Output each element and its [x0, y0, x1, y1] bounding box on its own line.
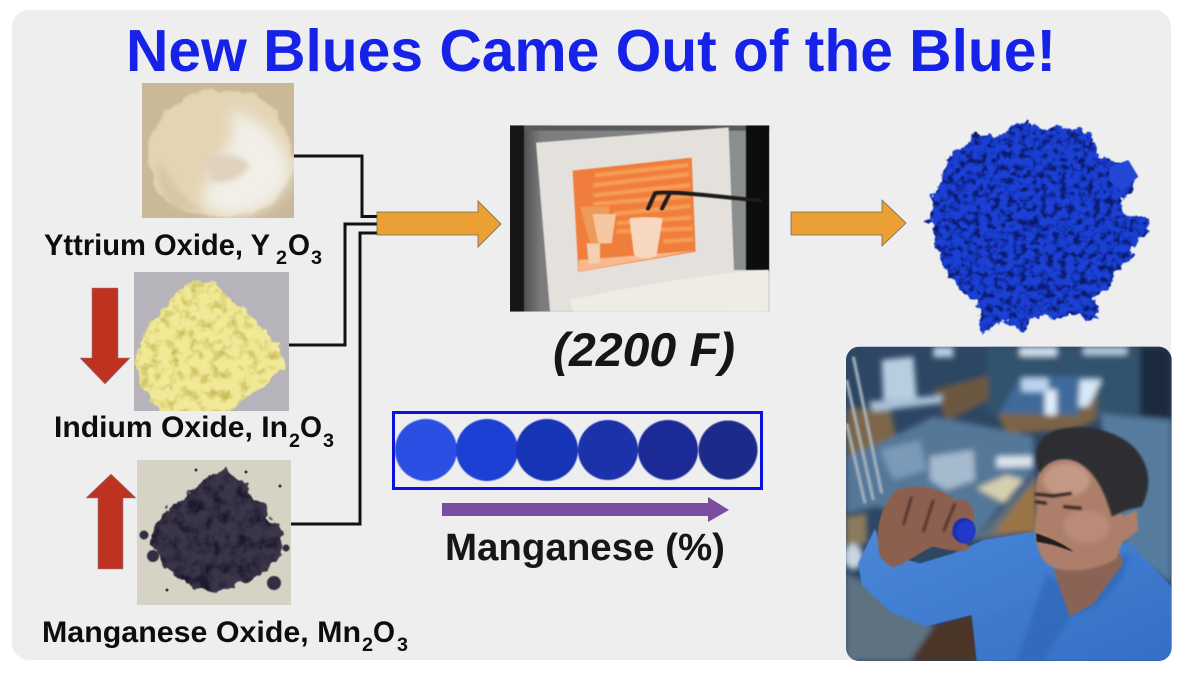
label: manganese percent: Manganese (%) [445, 527, 725, 569]
photo: indium oxide powder [134, 272, 289, 415]
shirt [858, 528, 1172, 661]
arrow: mix into furnace [377, 201, 501, 247]
blue pellet [952, 518, 976, 543]
label: indium oxide: Indium Oxide, In [54, 411, 288, 444]
arrow: manganese increase [442, 497, 729, 522]
photo: researcher holding blue pellet [844, 347, 1172, 661]
label: indium oxide: 3 [323, 431, 334, 452]
photo: manganese oxide powder [137, 460, 291, 605]
hand [878, 487, 974, 567]
colour swatches: increasing manganese [395, 419, 758, 481]
label: manganese oxide: 3 [397, 635, 408, 656]
colour swatch strip: frame [394, 412, 762, 488]
label: indium oxide [54, 411, 334, 452]
eyes and moustache [1035, 493, 1082, 508]
lab stand rods [847, 357, 882, 503]
photo: yttrium oxide powder [142, 83, 294, 218]
label: yttrium oxide [44, 229, 322, 269]
arrow: manganese increasing [86, 474, 136, 569]
furnace temperature label: (2200 F) [553, 323, 735, 376]
label: yttrium oxide: O [288, 229, 310, 262]
lab background [844, 347, 1172, 661]
photo: blue powder product [920, 122, 1150, 333]
arrow: furnace to product [791, 200, 906, 246]
label: yttrium oxide: Yttrium Oxide, Y [44, 229, 270, 262]
hair [1036, 427, 1148, 517]
label: indium oxide: 2 [289, 431, 300, 452]
label: yttrium oxide: 2 [276, 248, 287, 269]
label: indium oxide: O [300, 411, 322, 444]
label: manganese oxide: Manganese Oxide, Mn [42, 616, 361, 649]
label: manganese oxide: 2 [362, 635, 373, 656]
photo: furnace at 2200 F [510, 125, 769, 312]
connector lines: ingredients to mix arrow [289, 156, 377, 524]
label: manganese oxide: O [373, 616, 395, 649]
title: New Blues Came Out of the Blue! [126, 18, 1056, 84]
arrow: indium decreasing [80, 288, 130, 384]
label: yttrium oxide: 3 [311, 248, 322, 269]
neck [1053, 553, 1123, 617]
face [1034, 459, 1138, 570]
